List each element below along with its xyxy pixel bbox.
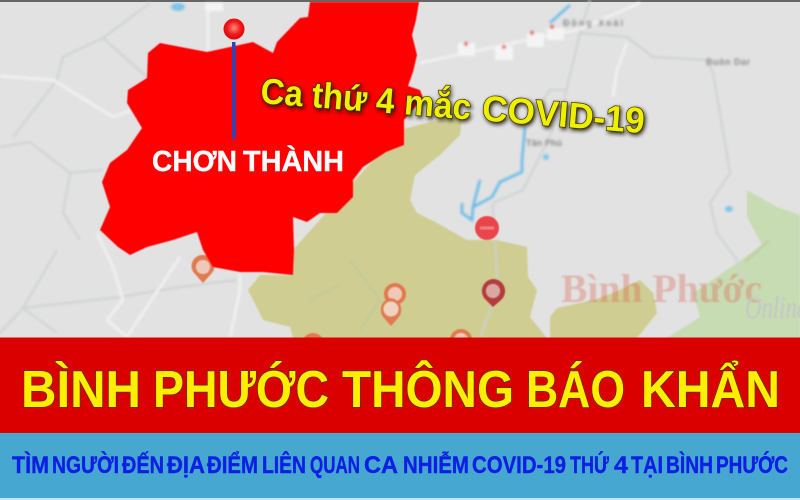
- callout: Ca thứ 4 mắc COVID-19: [259, 69, 648, 143]
- subtitle text: THỨ: [570, 451, 609, 479]
- map: khaki and green regions: [248, 117, 800, 338]
- marker: orange left: [192, 255, 214, 283]
- title text: [21, 360, 780, 419]
- pin line and marker: [222, 17, 246, 139]
- title text: BÌNH: [21, 361, 141, 419]
- icon: map markers: [192, 216, 505, 355]
- label: Chơn Thành: [152, 144, 344, 178]
- map: roads, rivers and place names: Đồng Xoài: [563, 18, 623, 28]
- callout: Ca thứ 4 mắc COVID-19: mắc: [403, 80, 473, 128]
- label: Chơn Thành: CHƠN: [152, 146, 237, 178]
- marker: dark red: [482, 279, 505, 307]
- subtitle text: ĐIỂM: [207, 451, 258, 479]
- subtitle text: LIÊN: [262, 451, 306, 479]
- subtitle text: TÌM: [12, 451, 49, 479]
- subtitle text: NHIỄM: [403, 450, 469, 479]
- title text: KHẨN: [641, 360, 780, 419]
- marker: orange lower: [450, 329, 472, 351]
- subtitle text: 4: [614, 452, 628, 479]
- label: Chơn Thành: THÀNH: [243, 144, 344, 178]
- subtitle text: COVID-19: [472, 452, 566, 479]
- title text: BÁO: [526, 361, 625, 419]
- subtitle banner: [0, 433, 800, 500]
- callout: Ca thứ 4 mắc COVID-19: COVID-19: [481, 88, 646, 141]
- subtitle text: CA: [364, 452, 398, 479]
- subtitle text: [12, 450, 788, 479]
- subtitle text: NGƯỜI: [52, 451, 119, 479]
- marker: orange edge: [302, 333, 324, 355]
- map: roads, rivers and place names: Buôn Dar: [706, 57, 750, 67]
- title banner: [0, 338, 800, 433]
- map: roads, rivers and place names: Tân Phú: [526, 138, 562, 148]
- subtitle text: QUAN: [310, 452, 360, 479]
- subtitle text: ĐẾN: [122, 451, 164, 479]
- subtitle text: ĐỊA: [167, 452, 205, 479]
- map: roads, rivers and place names: [0, 0, 770, 338]
- watermark: Bình Phước Online: Bình Phước: [561, 266, 762, 311]
- title text: THÔNG: [342, 360, 514, 419]
- subtitle text: BÌNH: [666, 451, 713, 479]
- marker: stop: [475, 216, 499, 240]
- subtitle text: TẠI: [631, 452, 663, 479]
- callout: Ca thứ 4 mắc COVID-19: Ca thứ 4: [259, 70, 396, 121]
- watermark: Bình Phước Online: [561, 266, 800, 325]
- callout: Ca thứ 4 mắc COVID-19: COVID-19: [482, 90, 648, 143]
- map: Chơn Thành district: [100, 2, 423, 275]
- marker: orange pair: [381, 283, 406, 326]
- title text: PHƯỚC: [153, 361, 329, 419]
- callout: Ca thứ 4 mắc COVID-19: mắc: [404, 83, 474, 130]
- callout: Ca thứ 4 mắc COVID-19: Ca thứ 4: [261, 72, 397, 124]
